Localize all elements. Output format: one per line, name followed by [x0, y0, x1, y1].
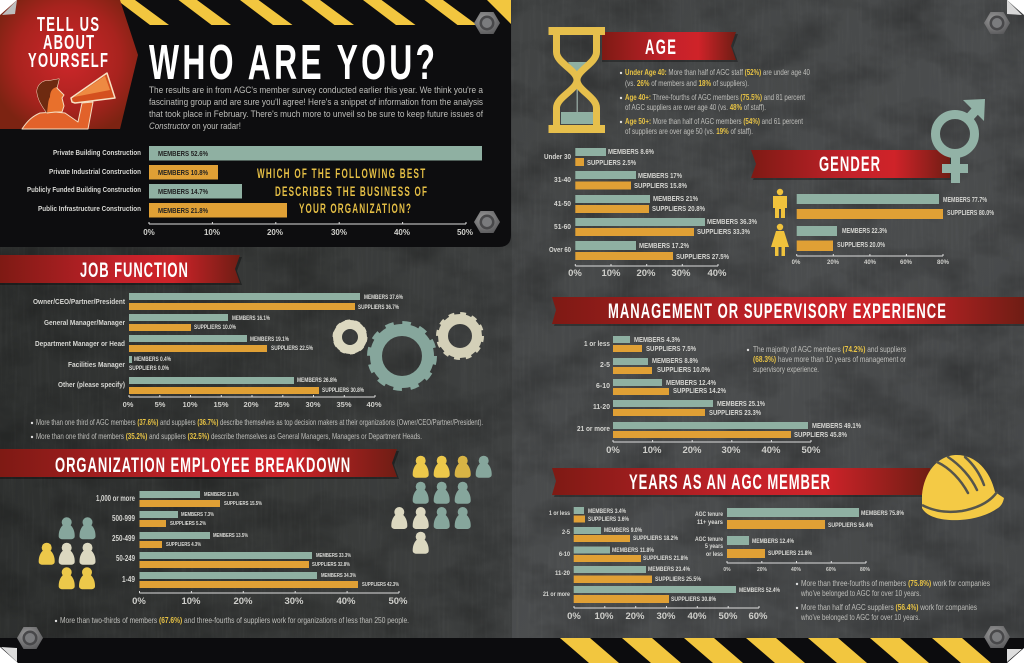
- badge heading: YOURSELF: [28, 49, 108, 72]
- bar chart: employee breakdown: 20%: [233, 596, 253, 607]
- bar chart: gender: 40%: [864, 260, 877, 266]
- bar chart: management experience: MEMBERS 4.3%: [634, 335, 680, 344]
- bar chart: employee breakdown: 1-49: [122, 575, 135, 584]
- bar chart: years as member: 6-10: [559, 552, 571, 558]
- bar chart: business of organization: Private Building Construction: [53, 148, 141, 157]
- bar chart: age: 40%: [707, 268, 727, 279]
- bar chart: job function: 0%: [123, 400, 134, 409]
- bar chart: business of organization: MEMBERS 10.8%: [158, 168, 208, 177]
- bar chart: business of organization: 10%: [204, 228, 220, 237]
- bar chart: job function: 5%: [155, 400, 166, 409]
- bar chart: AGC tenure: 20%: [757, 567, 768, 573]
- bar chart: years as member: SUPPLIERS 25.5%: [655, 577, 702, 583]
- bar chart: gender: MEMBERS 22.3%: [842, 228, 888, 235]
- bar chart: age: [544, 147, 757, 279]
- banner: management experience: MANAGEMENT OR SUPERVISORY EXPERIENCE: [608, 299, 946, 323]
- badge heading: TELL US: [37, 13, 99, 36]
- bar chart: job function: 25%: [274, 400, 290, 409]
- bar chart: management experience: 1 or less: [584, 339, 610, 348]
- intro text: fascinating group and are sure you'll agree! Here's a snippet of information from the analysis: [149, 97, 483, 108]
- text: management note: (68.3%) have more than 10 years of management or: [753, 354, 906, 364]
- text: age notes: (vs. 26% of members and 18% of suppliers).: [625, 78, 749, 88]
- bar chart: employee breakdown: SUPPLIERS 5.2%: [170, 521, 206, 527]
- bar chart: job function: 15%: [213, 400, 229, 409]
- bar chart: gender: 20%: [827, 260, 840, 266]
- bar chart: employee breakdown: SUPPLIERS 4.3%: [166, 542, 201, 548]
- title: WHO ARE YOU?: [149, 35, 435, 90]
- bar chart: years as member: MEMBERS 52.4%: [739, 588, 781, 594]
- bar chart: age: MEMBERS 36.3%: [707, 217, 757, 226]
- bar chart: gender: SUPPLIERS 80.0%: [947, 210, 995, 217]
- icon: people group right: [391, 456, 492, 554]
- bar chart: gender: MEMBERS 77.7%: [943, 197, 988, 204]
- icon: man: [773, 189, 787, 218]
- bar chart: employee breakdown: 1,000 or more: [96, 494, 135, 503]
- bar chart: employee breakdown: MEMBERS 33.3%: [316, 553, 351, 559]
- bar chart: business of organization: 30%: [331, 228, 347, 237]
- bar chart: employee breakdown: MEMBERS 13.5%: [213, 533, 248, 539]
- bar chart: job function: Facilities Manager: [68, 360, 125, 369]
- bar chart: management experience: [577, 335, 861, 456]
- bar chart: gender: 0%: [792, 260, 801, 266]
- bar chart: job function: 20%: [243, 400, 259, 409]
- bar chart: management experience: 30%: [721, 445, 741, 456]
- bar chart: job function: Department Manager or Head: [35, 339, 125, 348]
- bar chart: management experience: 50%: [801, 445, 821, 456]
- text: job function notes: [31, 417, 483, 441]
- banner: job function: [0, 255, 242, 285]
- bar chart: business of organization: MEMBERS 14.7%: [158, 187, 208, 196]
- bar chart: management experience: SUPPLIERS 7.5%: [646, 344, 696, 353]
- bar chart: AGC tenure: AGC tenure: [695, 537, 724, 543]
- bar chart: employee breakdown: SUPPLIERS 32.8%: [312, 562, 350, 568]
- bar chart: employee breakdown: 250-499: [112, 534, 135, 543]
- bar chart: years as member: SUPPLIERS 3.6%: [588, 517, 630, 523]
- bar chart: years as member: 60%: [748, 611, 768, 622]
- bar chart: business of organization: MEMBERS 52.6%: [158, 149, 208, 158]
- text: job function notes: More than one third of AGC members (37.6%) and suppliers (36.7%) describe themselves as top decision makers at their organizations (Owner/CEO/Partner/President).: [36, 417, 483, 427]
- bar chart: age: Over 60: [549, 245, 571, 254]
- icon: hard hat: [922, 455, 1004, 520]
- bar chart: AGC tenure: 60%: [826, 567, 837, 573]
- question heading: DESCRIBES THE BUSINESS OF: [275, 185, 427, 200]
- bar chart: age: MEMBERS 8.6%: [608, 147, 654, 156]
- bar chart: years as member: 0%: [567, 611, 581, 622]
- icon: gears: [334, 314, 482, 388]
- bar chart: gender: SUPPLIERS 20.0%: [837, 242, 886, 249]
- banner: organization employee breakdown: ORGANIZATION EMPLOYEE BREAKDOWN: [55, 453, 350, 477]
- bar chart: years as member: 40%: [687, 611, 707, 622]
- bar chart: age: SUPPLIERS 15.8%: [634, 181, 687, 190]
- bar chart: age: MEMBERS 17%: [638, 171, 682, 180]
- text: management note: [747, 344, 906, 374]
- section: management or supervisory experience: [552, 297, 1024, 456]
- bar chart: business of organization: 0%: [143, 228, 155, 237]
- bar chart: years as member: SUPPLIERS 21.8%: [643, 556, 689, 562]
- text: age notes: [620, 67, 810, 136]
- bar chart: age: MEMBERS 17.2%: [639, 241, 689, 250]
- bar chart: AGC tenure: SUPPLIERS 21.8%: [768, 551, 813, 557]
- question heading: YOUR ORGANIZATION?: [299, 202, 411, 217]
- bar chart: AGC tenure: [695, 508, 905, 573]
- text: tenure notes: More than half of AGC suppliers (56.4%) work for companies: [801, 602, 977, 612]
- bar chart: gender: 60%: [900, 260, 913, 266]
- bar chart: management experience: 10%: [642, 445, 662, 456]
- bar chart: years as member: 1 or less: [549, 511, 571, 517]
- bar chart: business of organization: Publicly Funded Building Construction: [27, 185, 141, 194]
- text: management note: The majority of AGC members (74.2%) and suppliers: [753, 344, 906, 354]
- bar chart: job function: Other (please specify): [58, 380, 125, 389]
- bar chart: management experience: 40%: [761, 445, 781, 456]
- bar chart: years as member: MEMBERS 23.4%: [648, 567, 691, 573]
- banner: gender: [751, 150, 952, 180]
- bar chart: business of organization: Private Industrial Construction: [49, 167, 141, 176]
- question heading: [257, 167, 427, 217]
- bar chart: job function: MEMBERS 0.4%: [134, 357, 172, 363]
- bar chart: job function: 35%: [336, 400, 352, 409]
- bar chart: years as member: 10%: [594, 611, 614, 622]
- section: job function: [0, 255, 483, 441]
- bar chart: management experience: 11-20: [593, 402, 610, 411]
- bar chart: employee breakdown: MEMBERS 34.3%: [321, 573, 356, 579]
- bar chart: management experience: 0%: [606, 445, 620, 456]
- bar chart: years as member: MEMBERS 11.8%: [612, 548, 655, 554]
- bar chart: years as member: 2-5: [562, 530, 571, 536]
- intro text: that took place in February. There's much more to unveil so be sure to keep future issues of: [149, 109, 483, 120]
- badge heading: [28, 13, 108, 72]
- text: age notes: of suppliers are over age 50 (vs. 19% of staff).: [625, 126, 753, 136]
- bar chart: years as member: [543, 507, 781, 622]
- bar chart: employee breakdown: 50%: [388, 596, 408, 607]
- bar chart: job function: 40%: [366, 400, 382, 409]
- bar chart: job function: SUPPLIERS 36.7%: [358, 305, 400, 311]
- bar chart: AGC tenure: 80%: [860, 567, 871, 573]
- banner: organization employee breakdown: [0, 449, 399, 479]
- section: gender: [751, 99, 995, 266]
- bottom band: left: [0, 638, 512, 663]
- bar chart: business of organization: MEMBERS 21.8%: [158, 206, 208, 215]
- bar chart: age: 41-50: [554, 199, 571, 208]
- banner: years as member: YEARS AS AN AGC MEMBER: [629, 470, 830, 494]
- bar chart: job function: MEMBERS 19.1%: [250, 337, 290, 343]
- bar chart: employee breakdown: 30%: [284, 596, 304, 607]
- bar chart: management experience: SUPPLIERS 10.0%: [657, 365, 710, 374]
- bar chart: business of organization: 20%: [267, 228, 283, 237]
- bar chart: AGC tenure: 0%: [723, 567, 731, 573]
- bar chart: AGC tenure: AGC tenure: [695, 512, 724, 518]
- bottom band: right hazard stripes: [512, 638, 1024, 663]
- text: tenure notes: who've belonged to AGC for over 10 years.: [800, 588, 921, 598]
- text: age notes: Age 40+: Three-fourths of AGC members (75.5%) and 81 percent: [625, 92, 805, 102]
- bar chart: AGC tenure: 40%: [791, 567, 802, 573]
- icon: hourglass: [548, 27, 605, 133]
- bar chart: business of organization: 40%: [394, 228, 410, 237]
- section: age: [544, 27, 810, 279]
- bar chart: management experience: MEMBERS 25.1%: [717, 399, 765, 408]
- bar chart: age: SUPPLIERS 33.3%: [697, 227, 750, 236]
- bar chart: management experience: 2-5: [600, 360, 610, 369]
- bar chart: age: 20%: [636, 268, 656, 279]
- bar chart: employee breakdown: 0%: [132, 596, 146, 607]
- bar chart: age: SUPPLIERS 2.5%: [587, 158, 636, 167]
- section: years as an AGC member: [543, 455, 1004, 622]
- bar chart: AGC tenure: MEMBERS 12.4%: [752, 539, 795, 545]
- bar chart: job function: [33, 293, 404, 409]
- text: age notes: of AGC suppliers are over age 40 (vs. 48% of staff).: [625, 102, 766, 112]
- bar chart: age: 10%: [601, 268, 621, 279]
- bar chart: job function: SUPPLIERS 30.8%: [322, 388, 365, 394]
- bar chart: years as member: MEMBERS 9.0%: [604, 528, 643, 534]
- bar chart: management experience: 20%: [682, 445, 702, 456]
- bar chart: AGC tenure: 11+ years: [697, 520, 724, 526]
- bar chart: gender: 80%: [937, 260, 950, 266]
- bar chart: years as member: 21 or more: [543, 592, 571, 598]
- bar chart: gender: [792, 194, 995, 266]
- red hexagon badge: [0, 0, 138, 129]
- bar chart: business of organization: 50%: [457, 228, 473, 237]
- bar chart: years as member: SUPPLIERS 18.2%: [633, 536, 679, 542]
- bar chart: years as member: 30%: [656, 611, 676, 622]
- bar chart: age: 31-40: [554, 175, 571, 184]
- text: age notes: Under Age 40: More than half of AGC staff (52%) are under age 40: [625, 67, 810, 77]
- icon: gender symbol: [936, 99, 985, 183]
- text: tenure notes: who've belonged to AGC for over 10 years.: [800, 612, 920, 622]
- text: age notes: Age 50+: More than half of AGC members (54%) and 61 percent: [625, 116, 803, 126]
- bar chart: employee breakdown: [96, 491, 408, 607]
- bar chart: years as member: 20%: [625, 611, 645, 622]
- question heading: WHICH OF THE FOLLOWING BEST: [257, 167, 425, 182]
- bar chart: management experience: SUPPLIERS 14.2%: [673, 386, 726, 395]
- bar chart: job function: SUPPLIERS 22.5%: [271, 346, 314, 352]
- bar chart: age: SUPPLIERS 20.8%: [652, 204, 705, 213]
- banner: age: AGE: [645, 35, 676, 59]
- icon: people group left: [39, 517, 96, 589]
- bar chart: AGC tenure: MEMBERS 75.8%: [861, 511, 905, 517]
- banner: years as member: [552, 468, 930, 497]
- bar chart: job function: MEMBERS 37.6%: [364, 295, 404, 301]
- bar chart: job function: SUPPLIERS 0.0%: [129, 366, 170, 372]
- bar chart: management experience: SUPPLIERS 23.3%: [709, 408, 761, 417]
- bar chart: business of organization: Public Infrastructure Construction: [38, 204, 141, 213]
- bar chart: age: 51-60: [554, 222, 571, 231]
- intro text: The results are in from AGC's member survey conducted earlier this year. We think you're a: [149, 85, 484, 96]
- icon: man with megaphone: [22, 73, 115, 129]
- text: tenure notes: More than three-fourths of members (75.8%) work for companies: [801, 578, 990, 588]
- bar chart: years as member: SUPPLIERS 30.8%: [671, 597, 717, 603]
- bar chart: employee breakdown: SUPPLIERS 42.3%: [362, 582, 399, 588]
- bar chart: age: 0%: [568, 268, 582, 279]
- section: organization employee breakdown: [0, 449, 492, 625]
- bar chart: employee breakdown: MEMBERS 11.6%: [204, 492, 239, 498]
- bar chart: management experience: MEMBERS 12.4%: [666, 378, 716, 387]
- bar chart: job function: MEMBERS 26.8%: [297, 378, 338, 384]
- bar chart: job function: Owner/CEO/Partner/President: [33, 297, 125, 306]
- bar chart: age: Under 30: [544, 152, 571, 161]
- bar chart: age: 30%: [671, 268, 691, 279]
- bar chart: management experience: MEMBERS 8.8%: [652, 356, 698, 365]
- badge heading: ABOUT: [43, 31, 95, 54]
- bar chart: age: MEMBERS 21%: [653, 194, 698, 203]
- bar chart: employee breakdown: 10%: [181, 596, 201, 607]
- text: job function notes: More than one third of members (35.2%) and suppliers (32.5%) describe themselves as General Managers, Managers or Department Heads.: [36, 431, 422, 441]
- hazard stripes: top: [117, 0, 511, 25]
- bar chart: employee breakdown: SUPPLIERS 15.5%: [224, 501, 262, 507]
- text: employee note: More than two-thirds of members (67.6%) and three-fourths of suppliers work for organizations of less than 250 people.: [60, 615, 409, 625]
- bar chart: employee breakdown: 500-999: [112, 514, 135, 523]
- bar chart: job function: MEMBERS 16.1%: [232, 316, 271, 322]
- bar chart: job function: General Manager/Manager: [44, 318, 125, 327]
- bar chart: job function: 30%: [305, 400, 321, 409]
- bar chart: AGC tenure: 5 years: [705, 544, 724, 550]
- bar chart: age: SUPPLIERS 27.5%: [676, 252, 729, 261]
- bar chart: management experience: 21 or more: [577, 424, 610, 433]
- intro text: Constructor on your radar!: [149, 121, 241, 132]
- bar chart: management experience: MEMBERS 49.1%: [812, 421, 861, 430]
- banner: management experience: [552, 297, 1024, 326]
- intro text: [149, 85, 484, 132]
- bar chart: job function: 10%: [182, 400, 198, 409]
- bar chart: business of organization: [27, 146, 482, 237]
- bar chart: years as member: MEMBERS 3.4%: [588, 509, 627, 515]
- banner: age: [602, 32, 738, 62]
- bar chart: employee breakdown: 50-249: [116, 554, 135, 563]
- bar chart: AGC tenure: or less: [706, 552, 724, 558]
- banner: gender: GENDER: [819, 152, 880, 176]
- icon: woman: [771, 224, 789, 256]
- text: management note: supervisory experience.: [753, 364, 819, 374]
- banner: job function: JOB FUNCTION: [80, 258, 188, 282]
- bar chart: management experience: SUPPLIERS 45.8%: [794, 430, 847, 439]
- panel: top-left black intro panel: [0, 0, 511, 247]
- bar chart: employee breakdown: MEMBERS 7.3%: [181, 512, 214, 518]
- bar chart: AGC tenure: SUPPLIERS 56.4%: [828, 523, 874, 529]
- bar chart: years as member: 50%: [718, 611, 738, 622]
- bar chart: employee breakdown: 40%: [336, 596, 356, 607]
- bar chart: job function: SUPPLIERS 10.0%: [194, 325, 237, 331]
- text: tenure notes: [796, 578, 990, 622]
- bar chart: years as member: 11-20: [555, 571, 571, 577]
- bar chart: management experience: 6-10: [596, 381, 610, 390]
